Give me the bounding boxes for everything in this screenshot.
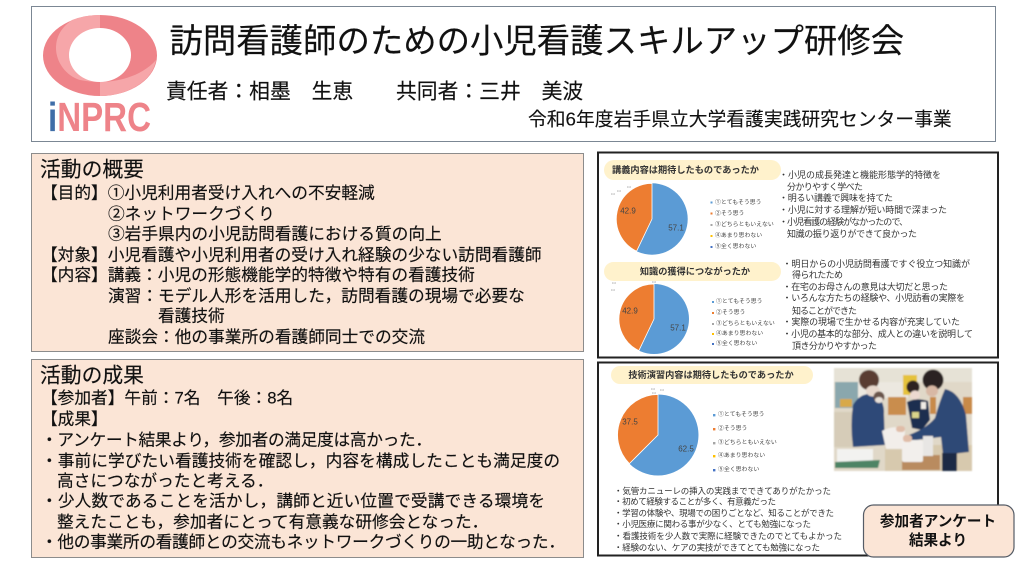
text block: knowledge comments: 得られたため (792, 269, 843, 280)
text block: overview details: 【対象】小児看護や小児利用者の受け入れ経験の少ない訪問看護師 (41, 246, 542, 264)
legend: lecture expectations: ①とてもそう思う (715, 198, 762, 206)
pie chart: lecture expectations: 0.0 (611, 192, 615, 196)
panel: activity results (32, 360, 584, 558)
text block: practical training comments (614, 486, 842, 552)
text block: lecture comments (779, 169, 947, 239)
text block: overview details: ②ネットワークづくり (108, 204, 275, 224)
logo: iNPRC: iNPRC (48, 94, 151, 140)
co-researcher: 共同者：三井 美波 (396, 80, 583, 104)
chart heading: knowledge acquisition (604, 262, 781, 281)
text block: overview details: 【目的】①小児利用者受け入れへの不安軽減 (41, 184, 375, 202)
pie chart: knowledge acquisition: 0.0 (611, 288, 615, 292)
legend: practical training expectations: ④あまり思わない (718, 451, 765, 459)
legend: knowledge acquisition: ④あまり思わない (716, 329, 763, 337)
chart heading: knowledge acquisition: 知識の獲得につながったか (640, 266, 751, 276)
pie chart: lecture expectations: 42.9 (620, 206, 636, 216)
legend: practical training expectations (713, 410, 777, 473)
text block: lecture comments: ・小児看護の経験がなかったので、 (779, 216, 908, 227)
legend: lecture expectations: ②そう思う (715, 209, 744, 217)
legend: lecture expectations: ③どちらともいえない (715, 220, 774, 228)
text block: lecture comments: ・小児の成長発達と機能形態学的特徴を (779, 169, 941, 180)
text block: practical training comments: ・経験のない、ケアの実技ができてとても勉強になった (614, 542, 820, 552)
legend: knowledge acquisition: ③どちらともいえない (716, 319, 775, 327)
text block: results details: 【参加者】午前：7名 午後：8名 (41, 388, 293, 408)
panel: lecture survey (598, 152, 998, 358)
legend: practical training expectations: ⑤全く思わない (718, 465, 759, 473)
panel: activity overview (32, 154, 584, 352)
pie chart: practical training expectations: 0.0 (651, 387, 655, 391)
pie chart: knowledge acquisition (611, 280, 689, 354)
text block: lecture comments: 分かりやすく学べた (787, 181, 863, 192)
legend: knowledge acquisition: ①とてもそう思う (716, 297, 763, 305)
text block: overview details (41, 184, 542, 346)
chart heading: lecture expectations (604, 160, 781, 180)
pie chart: knowledge acquisition: 42.9 (622, 306, 638, 316)
legend: practical training expectations: ②そう思う (718, 424, 747, 432)
pie chart: knowledge acquisition: 0.0 (652, 280, 656, 284)
project affiliation: 令和6年度岩手県立大学看護実践研究センター事業 (528, 108, 952, 130)
pie chart: knowledge acquisition: 57.1 (670, 324, 686, 332)
panel: practical training survey (598, 362, 998, 556)
legend: knowledge acquisition: ⑤全く思わない (716, 339, 757, 347)
legend: lecture expectations (710, 198, 774, 250)
pie chart: practical training expectations (618, 387, 698, 476)
text block: results details: ・少人数であることを活かし，講師と近い位置で受講できる環境を (41, 492, 545, 510)
text block: results details: ・他の事業所の看護師との交流もネットワークづくりの一助となった． (41, 532, 565, 552)
text block: results details (41, 388, 565, 552)
text block: knowledge comments: 知ることができた (792, 305, 857, 316)
legend: knowledge acquisition (712, 297, 775, 347)
logo: iNPRC (43, 15, 157, 140)
text block: lecture comments: 知識の振り返りができて良かった (787, 228, 917, 239)
pie chart: practical training expectations: 0.0 (652, 391, 656, 395)
text block: results details: 整えたことも，参加者にとって有意義な研修会となった． (57, 512, 488, 532)
text block: practical training comments: ・看護技術を少人数で実際に経験できたのでとてもよかった (614, 531, 842, 541)
panel: header (32, 6, 996, 142)
pie chart: practical training expectations: 37.5 (622, 418, 638, 426)
chart heading: lecture expectations: 講義内容は期待したものであったか (612, 164, 760, 175)
text block: results details: ・アンケート結果より，参加者の満足度は高かった． (41, 430, 432, 450)
pie chart: lecture expectations (611, 183, 688, 255)
legend: knowledge acquisition: ②そう思う (716, 308, 745, 316)
callout: source of results: 結果より (909, 531, 967, 549)
legend: lecture expectations: ④あまり思わない (715, 231, 762, 239)
text block: practical training comments: ・学習の体験や、現場での困りごとなど、知ることができた (614, 508, 834, 518)
chart heading: practical training expectations (611, 366, 813, 384)
text block: overview details: ③岩手県内の小児訪問看護における質の向上 (108, 224, 442, 244)
heading: activity overview: 活動の概要 (40, 158, 144, 182)
legend: lecture expectations: ⑤全く思わない (715, 242, 756, 250)
photo: participants at hands-on training (834, 368, 972, 471)
pie chart: lecture expectations: 0.0 (627, 185, 631, 189)
text block: practical training comments: ・小児医療に関わる事が少なく、とても勉強になった (614, 519, 811, 529)
text block: overview details: 演習：モデル人形を活用した，訪問看護の現場で必要な (108, 286, 525, 306)
callout: source of results (864, 505, 1014, 557)
text block: results details: 【成果】 (41, 410, 108, 428)
text block: knowledge comments: ・いろんな方たちの経験や、小児訪看の実際を (782, 292, 965, 303)
chart heading: practical training expectations: 技術演習内容は期待したものであったか (628, 369, 794, 380)
legend: practical training expectations: ③どちらともいえない (718, 438, 777, 446)
pie chart: knowledge acquisition: 0.0 (612, 281, 616, 285)
pie chart: practical training expectations: 0.0 (660, 388, 664, 392)
title: 訪問看護師のための小児看護スキルアップ研修会 (170, 24, 904, 60)
text block: lecture comments: ・明るい講義で興味を持てた (779, 192, 893, 203)
text block: results details: 高さにつながったと考える． (57, 472, 273, 490)
legend: practical training expectations: ①とてもそう思う (718, 410, 765, 418)
text block: results details: ・事前に学びたい看護技術を確認し，内容を構成したことも満足度の (41, 452, 560, 470)
text block: knowledge comments: ・明日からの小児訪問看護ですぐ役立つ知識が (782, 258, 970, 269)
callout: source of results: 参加者アンケート (880, 513, 996, 530)
text block: overview details: 座談会：他の事業所の看護師同士での交流 (108, 328, 425, 346)
responsible person: 責任者：相墨 生恵 (166, 80, 353, 104)
text block: overview details: 【内容】講義：小児の形態機能学的特徴や特有の看護技術 (41, 266, 475, 284)
pie chart: lecture expectations: 0.0 (617, 189, 621, 193)
text block: knowledge comments (782, 258, 973, 351)
text block: knowledge comments: ・小児の基本的な部分、成人との違いを説明して (782, 328, 973, 339)
pie chart: lecture expectations: 57.1 (668, 224, 684, 232)
heading: activity results: 活動の成果 (40, 364, 144, 388)
text block: knowledge comments: 頂き分かりやすかった (792, 341, 877, 351)
text block: practical training comments: ・気管カニューレの挿入の実践までできてありがたかった (614, 486, 831, 496)
text block: knowledge comments: ・実際の現場で生かせる内容が充実していた (782, 316, 960, 327)
text block: knowledge comments: ・在宅のお母さんの意見は大切だと思った (782, 281, 948, 292)
text block: lecture comments: ・小児に対する理解が短い時間で深まった (779, 204, 947, 215)
text block: practical training comments: ・初めて経験することが多く、有意義だった (614, 496, 776, 506)
text block: overview details: 看護技術 (158, 306, 225, 326)
pie chart: practical training expectations: 62.5 (678, 444, 694, 454)
